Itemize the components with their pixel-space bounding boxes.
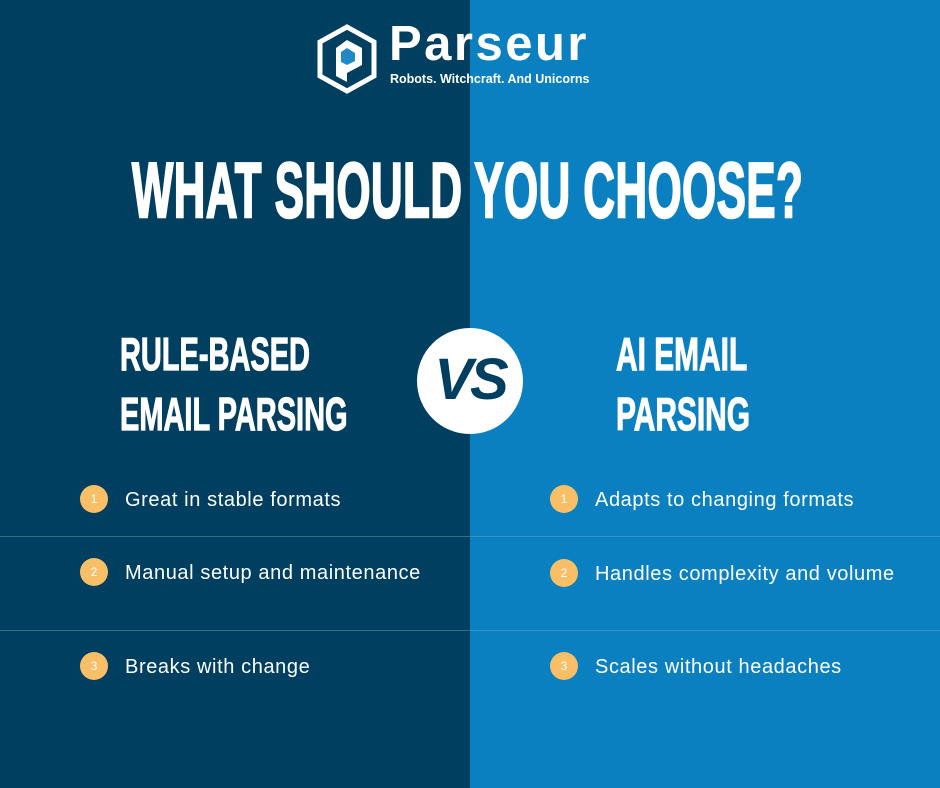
item 2: Handles complexity and volume <box>595 563 895 585</box>
title: WHAT SHOULD YOU CHOOSE? <box>132 146 803 234</box>
logo <box>318 17 589 94</box>
item 1: 1 <box>561 492 567 506</box>
heading: rule-based: RULE-BASED <box>120 328 310 380</box>
item 3 <box>550 652 842 680</box>
icon: parseur hexagon <box>318 24 376 94</box>
list: rule-based <box>80 485 421 680</box>
item 2 <box>80 558 421 586</box>
item 2: 2 <box>91 565 97 579</box>
heading: rule-based: EMAIL PARSING <box>120 388 348 440</box>
item 2: 2 <box>561 566 567 580</box>
heading: ai <box>616 328 750 440</box>
item 1 <box>80 485 341 513</box>
item 3: Scales without headaches <box>595 656 842 678</box>
vs badge: VS <box>434 347 506 412</box>
item 2: Manual setup and maintenance <box>125 562 421 584</box>
item 2 <box>550 559 895 587</box>
item 3: 3 <box>561 659 567 673</box>
vs badge <box>417 328 523 434</box>
item 1: Adapts to changing formats <box>595 489 854 511</box>
list: ai <box>550 485 895 680</box>
heading: ai: AI EMAIL <box>616 328 747 380</box>
heading: rule-based <box>120 328 348 440</box>
item 1 <box>550 485 854 513</box>
item 3: Breaks with change <box>125 656 310 678</box>
item 1: Great in stable formats <box>125 489 341 511</box>
item 1: 1 <box>91 492 97 506</box>
brand name: Parseur <box>389 17 589 71</box>
item 3 <box>80 652 310 680</box>
tagline: Robots. Witchcraft. And Unicorns <box>390 72 589 86</box>
item 3: 3 <box>91 659 97 673</box>
heading: ai: PARSING <box>616 388 750 440</box>
